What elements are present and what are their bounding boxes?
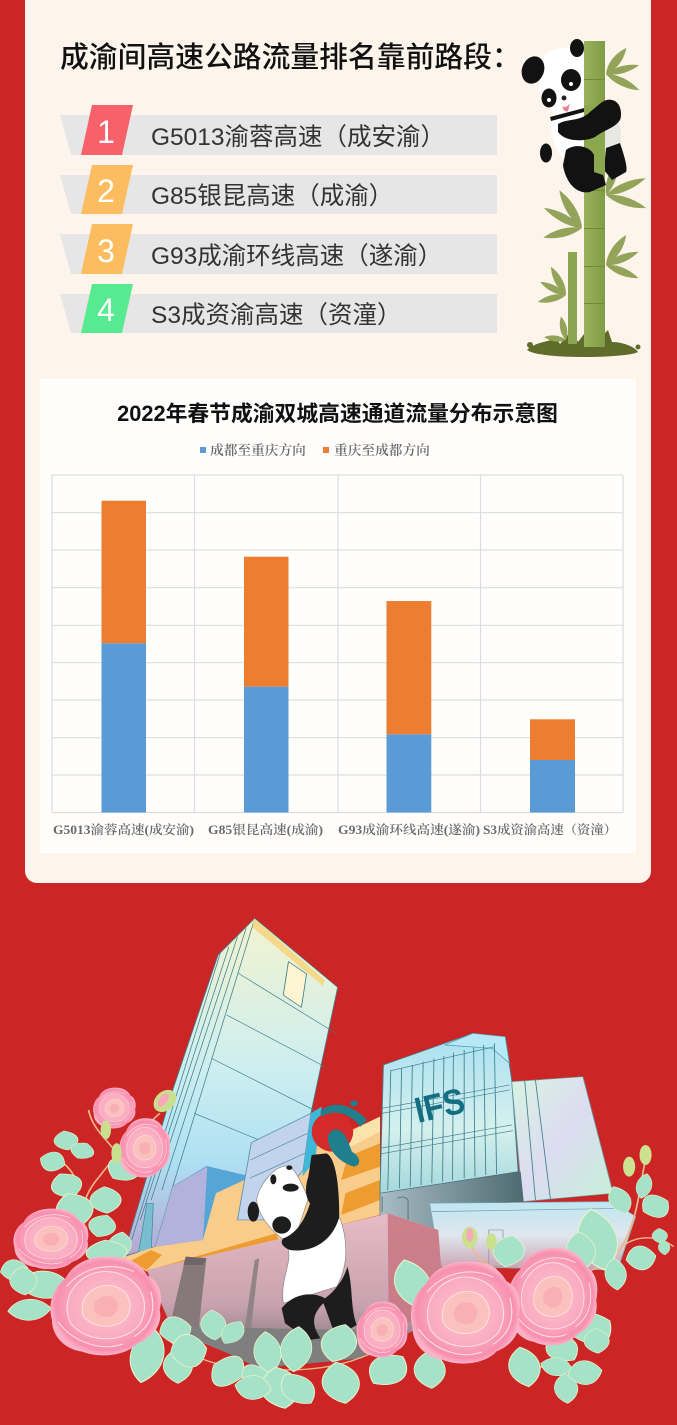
stems <box>52 1110 674 1372</box>
rank row 3 <box>60 224 497 274</box>
category axis labels <box>53 822 617 837</box>
chart legend <box>200 442 430 458</box>
stacked bar G93 <box>386 601 431 812</box>
podium <box>147 1213 441 1367</box>
icon: panda climbing bamboo <box>518 39 647 357</box>
rank row 4: S3成资渝高速（资潼） <box>151 301 401 329</box>
leaves <box>0 1129 675 1411</box>
panel: chart <box>40 379 636 853</box>
category axis labels: G93成渝环线高速(遂渝) <box>338 822 480 837</box>
panel: route ranking and chart card <box>25 0 651 883</box>
ranking list <box>60 105 497 333</box>
IFS sign: IFS <box>411 1080 469 1131</box>
category axis labels: G85银昆高速(成渝) <box>208 822 323 837</box>
roses and leaves <box>0 1087 675 1411</box>
rank row 4: 4 <box>97 292 115 328</box>
rank row 2 <box>60 165 497 214</box>
category axis labels: S3成资渝高速（资潼） <box>483 822 617 837</box>
chart legend: 重庆至成都方向 <box>334 442 430 458</box>
buildings <box>123 918 636 1368</box>
chart legend: 成都至重庆方向 <box>210 442 306 458</box>
IFS tower <box>380 1033 518 1193</box>
chart title: 2022年春节成渝双城高速通道流量分布示意图 <box>117 401 558 426</box>
category axis labels: G5013渝蓉高速(成安渝) <box>53 822 194 837</box>
chart grid <box>52 475 623 812</box>
rank row 1: G5013渝蓉高速（成安渝） <box>151 123 445 151</box>
rank row 4 <box>60 284 497 333</box>
rank row 3: G93成渝环线高速（遂渝） <box>151 242 442 270</box>
roses <box>13 1088 597 1364</box>
rank row 3: 3 <box>97 233 115 269</box>
rose buds <box>101 1087 652 1250</box>
rank row 2: 2 <box>97 173 115 209</box>
panda reaching up <box>248 1153 357 1340</box>
stacked bar G85 <box>244 557 288 812</box>
red ball with teal swirl <box>312 1112 353 1152</box>
title: 成渝间高速公路流量排名靠前路段： <box>60 42 521 74</box>
rank row 1 <box>60 105 497 155</box>
rank row 1: 1 <box>97 114 115 150</box>
panda body and limbs <box>540 100 627 192</box>
rank row 2: G85银昆高速（成渝） <box>151 182 393 210</box>
stacked bar G5013 <box>102 501 146 812</box>
panda head <box>518 39 584 114</box>
illustration: Chengdu IFS buildings with panda and roses <box>0 918 675 1411</box>
stacked bar S3 <box>530 719 575 812</box>
